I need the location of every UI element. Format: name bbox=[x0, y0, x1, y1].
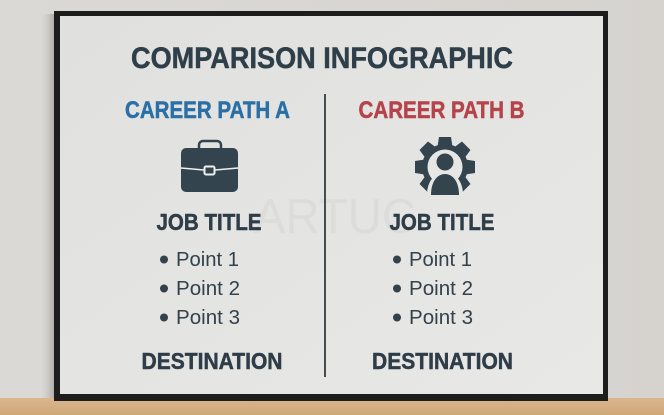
destination B: DESTINATION bbox=[372, 348, 513, 374]
title: COMPARISON INFOGRAPHIC bbox=[131, 42, 513, 75]
job title B: JOB TITLE bbox=[390, 209, 494, 235]
bullet list A: Point 1 bbox=[176, 249, 239, 271]
wooden shelf bbox=[0, 398, 664, 415]
bullet list A: Point 3 bbox=[176, 307, 240, 329]
icon: gear with person bbox=[415, 137, 475, 195]
bullet list B bbox=[393, 249, 473, 329]
picture frame bbox=[54, 11, 608, 401]
heading: career path A: CAREER PATH A bbox=[125, 97, 290, 124]
destination A: DESTINATION bbox=[142, 348, 282, 374]
watermark: ARTUC bbox=[254, 190, 416, 244]
bullet list A bbox=[160, 249, 240, 329]
center divider bbox=[324, 94, 326, 377]
bullet list B: Point 3 bbox=[409, 307, 473, 329]
bullet list B: Point 1 bbox=[409, 249, 472, 271]
panel: career path B bbox=[358, 97, 524, 374]
job title A: JOB TITLE bbox=[156, 209, 262, 235]
bullet list B: Point 2 bbox=[409, 278, 473, 300]
heading: career path B: CAREER PATH B bbox=[358, 97, 524, 124]
frame shadow bbox=[40, 14, 54, 398]
panel: career path A bbox=[125, 97, 290, 374]
icon: briefcase bbox=[181, 141, 238, 192]
bullet list A: Point 2 bbox=[176, 278, 240, 300]
